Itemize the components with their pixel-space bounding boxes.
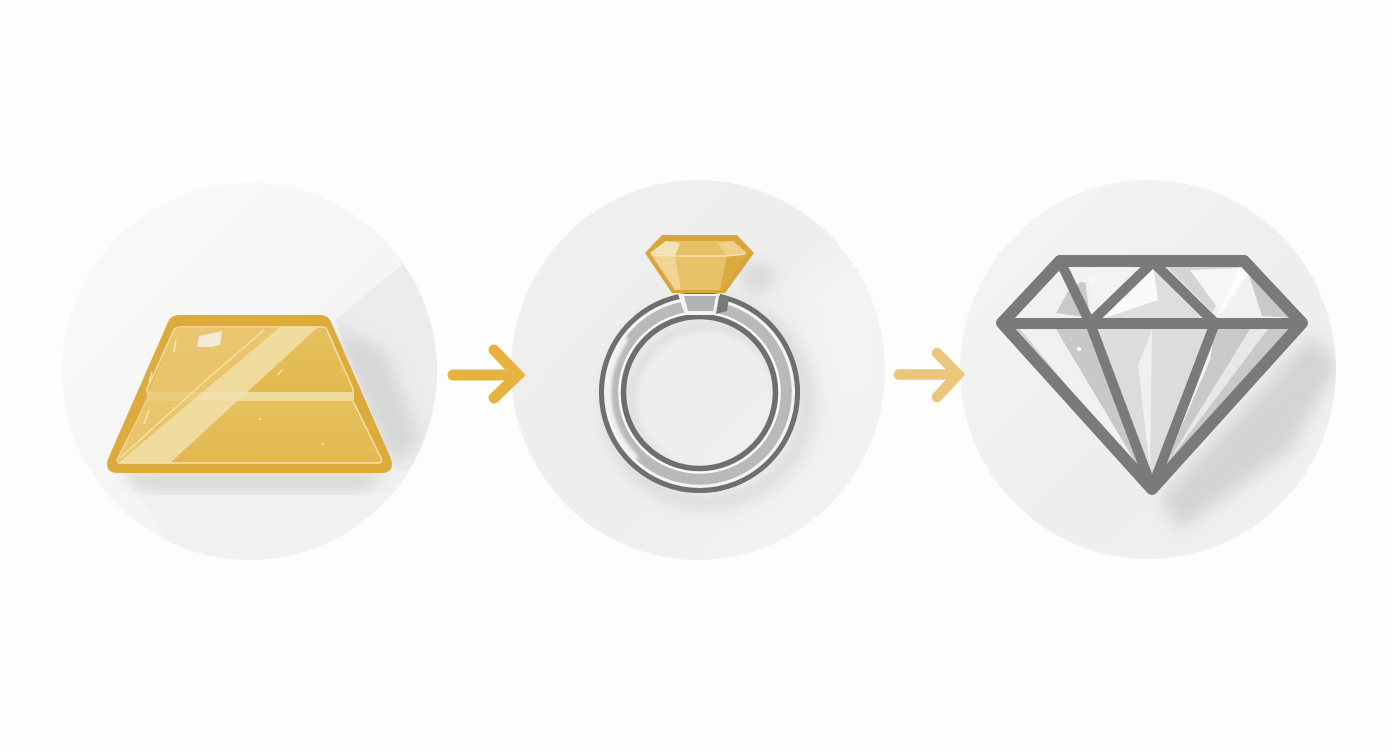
arrow: gold to ring: [453, 350, 518, 398]
ring band: [602, 294, 798, 490]
diamond outline: [1002, 261, 1302, 489]
facets: [1002, 261, 1302, 488]
panel: gold bar circle: [107, 256, 437, 560]
prong: [678, 294, 720, 315]
icon: diamond ring: [602, 235, 798, 490]
icon: gold bar: [107, 315, 392, 473]
stone: [645, 235, 754, 293]
panel: ring circle: [511, 180, 890, 560]
icon: diamond: [1002, 261, 1302, 489]
infographic: gold, ring and diamond sequence: [107, 180, 1336, 560]
panel: diamond circle: [960, 180, 1338, 559]
arrow: ring to diamond: [899, 353, 958, 397]
